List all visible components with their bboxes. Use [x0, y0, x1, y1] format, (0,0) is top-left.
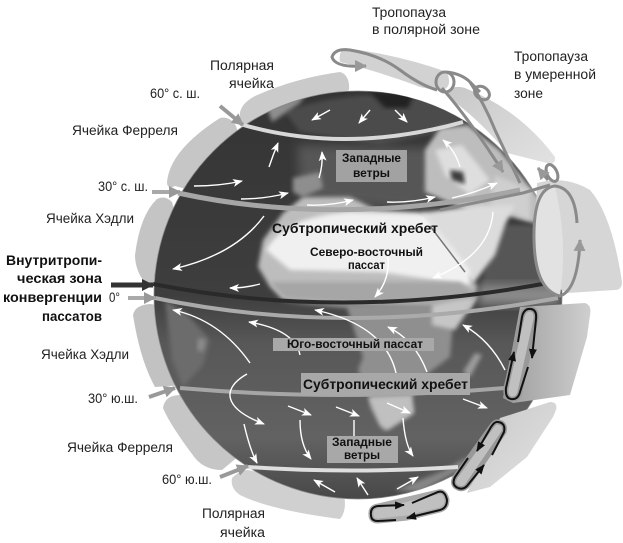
Hadley cell south-west	[133, 304, 185, 387]
wind arrows on globe	[173, 110, 505, 495]
label: intertropical convergence zone: конвергенции	[3, 290, 102, 305]
panel: north westerlies label: ветры	[353, 166, 390, 180]
label: polar tropopause: в полярной зоне	[372, 22, 480, 37]
label: intertropical convergence zone	[3, 253, 103, 324]
Ferrel cell north-east	[448, 87, 555, 164]
panel: south westerlies label	[327, 435, 398, 463]
label: 30 north: 30° с. ш.	[98, 179, 148, 194]
Ferrel circulation loop	[454, 422, 504, 489]
label: temperate tropopause: Тропопауза	[514, 49, 589, 64]
60 south line	[248, 467, 458, 470]
label: Hadley cell south: Ячейка Хэдли	[41, 347, 129, 362]
label: polar tropopause	[372, 5, 480, 37]
Hadley cell inner shading	[534, 187, 563, 296]
equator line	[155, 298, 558, 318]
label: 30 south: 30° ю.ш.	[88, 391, 138, 406]
Ferrel cell south-east	[467, 402, 556, 493]
Hadley cell loop	[534, 186, 580, 296]
equatorial convergence line	[153, 282, 553, 303]
label: equator: 0°	[109, 290, 120, 305]
label: north-east trade wind: Северо-восточный	[310, 245, 423, 259]
label: polar cell south	[202, 506, 266, 540]
30 south line	[180, 388, 505, 395]
polar circulation loop	[371, 492, 447, 521]
panel: latitude bands	[153, 122, 558, 470]
Ferrel cell south-west	[163, 395, 240, 470]
60 north line	[240, 122, 463, 139]
Hadley cell north-east	[535, 180, 622, 293]
latitude pointer arrows	[111, 106, 248, 477]
polar cell north-east	[340, 48, 449, 89]
label: south-east trade wind: Юго-восточный пассат	[287, 339, 423, 351]
panel: north-east cells and tropopause	[332, 48, 622, 296]
label: north-east trade wind	[310, 245, 423, 272]
label: polar cell south: ячейка	[220, 525, 266, 540]
label: polar cell north	[210, 58, 275, 91]
label: intertropical convergence zone: Внутритропи-	[6, 253, 102, 268]
label: subtropical ridge north: Субтропический хребет	[272, 220, 438, 236]
label: temperate tropopause: в умеренной	[514, 67, 596, 82]
panel: south westerlies label: ветры	[344, 448, 380, 462]
polar cell north-west	[240, 72, 349, 124]
label: polar cell north: ячейка	[229, 76, 275, 91]
label: temperate tropopause	[514, 49, 596, 101]
label: polar cell north: Полярная	[210, 58, 274, 73]
label: Ferrel cell north: Ячейка Ферреля	[72, 123, 178, 138]
panel: left atmospheric cells	[133, 72, 349, 519]
Ferrel cell north-west	[167, 118, 240, 190]
label: Hadley cell north: Ячейка Хэдли	[46, 211, 134, 226]
panel: globe	[154, 91, 562, 499]
label: intertropical convergence zone: пассатов	[42, 309, 102, 324]
globe sphere	[154, 91, 562, 499]
panel: north westerlies label: Западные	[342, 151, 401, 165]
label: subtropical ridge south: Субтропический хребет	[303, 376, 468, 392]
label: 60 south: 60° ю.ш.	[162, 472, 212, 487]
label: temperate tropopause: зоне	[514, 86, 543, 101]
30 north line	[178, 190, 520, 210]
label: north-east trade wind: пассат	[348, 258, 385, 272]
continents	[165, 92, 560, 492]
Hadley cell north-west	[135, 198, 180, 283]
tropopause airflow lines	[332, 50, 560, 210]
polar cell south-west	[232, 470, 345, 519]
panel: north westerlies label	[336, 150, 407, 182]
label: 60 north: 60° с. ш.	[150, 86, 200, 101]
label: intertropical convergence zone: ческая зона	[17, 271, 103, 286]
Hadley circulation loop	[506, 309, 536, 399]
panel: south westerlies label: Западные	[332, 435, 392, 449]
panel: south-east cells	[371, 303, 590, 521]
Hadley cell south-east	[503, 303, 590, 403]
label: polar cell south: Полярная	[202, 506, 265, 521]
label: polar tropopause: Тропопауза	[372, 5, 447, 20]
label: Ferrel cell south: Ячейка Ферреля	[67, 440, 173, 455]
